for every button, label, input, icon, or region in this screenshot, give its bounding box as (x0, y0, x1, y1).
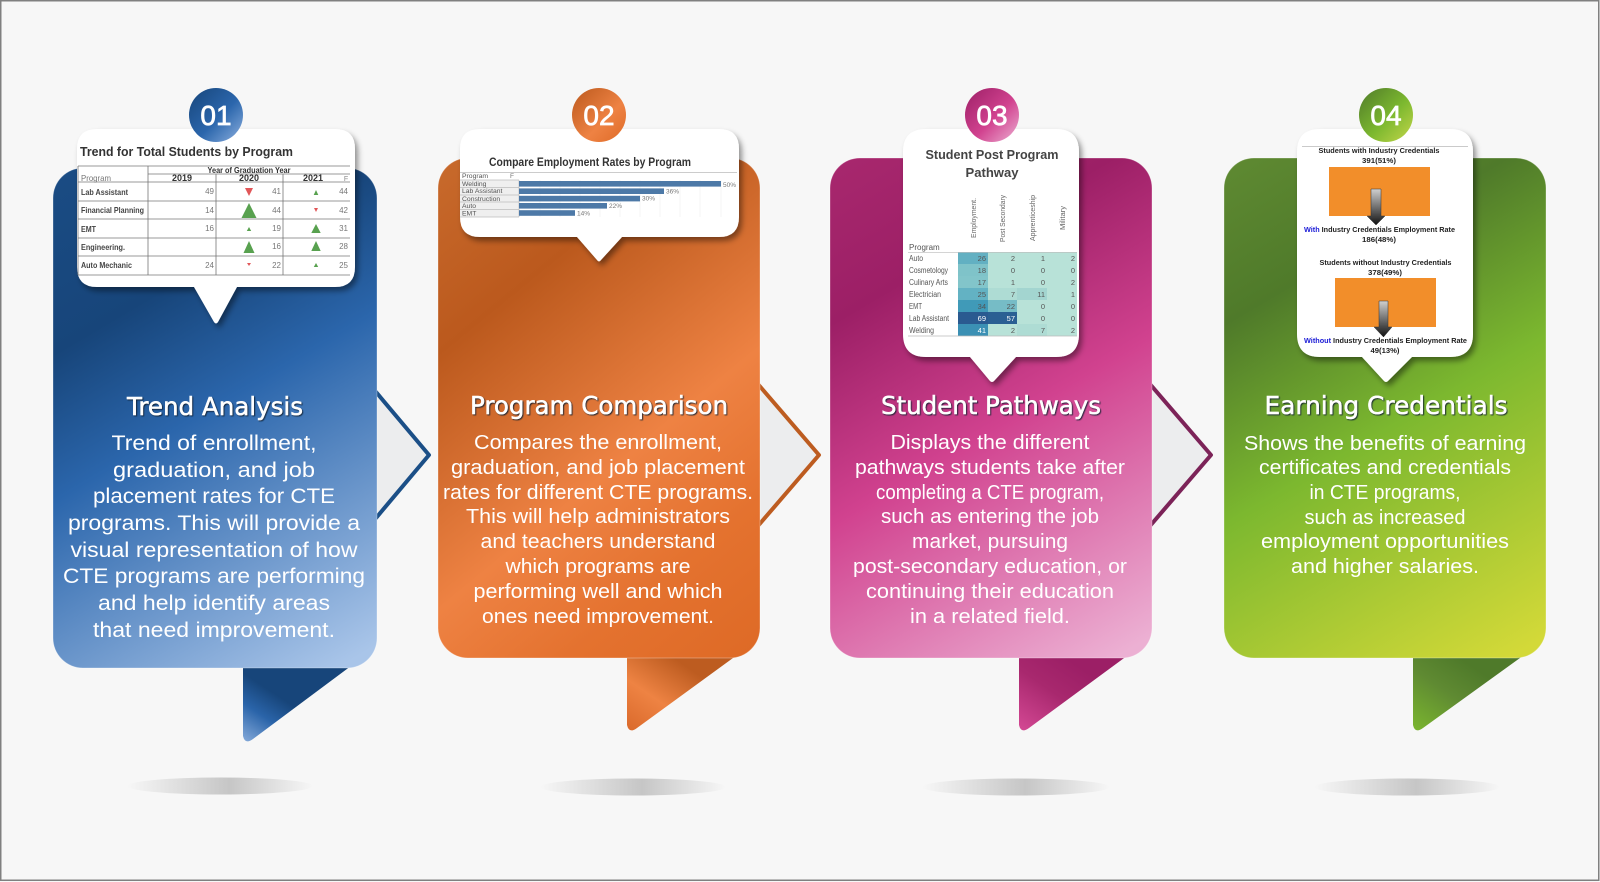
body text 3: in a related field. (910, 605, 1070, 628)
step 1: Trend Analysis (53, 88, 429, 794)
body text 3: continuing their education (866, 580, 1114, 603)
heat table: 0 (1071, 266, 1075, 275)
heat table: 34 (978, 302, 986, 311)
trend table: 22 (272, 261, 282, 270)
trend table: 19 (272, 224, 282, 233)
trend table: 49 (205, 187, 215, 196)
body text 2: and teachers understand (480, 530, 716, 553)
heat table title: Pathway (966, 165, 1019, 180)
heat table: Program (909, 243, 940, 252)
heat table: 2 (1011, 326, 1015, 335)
trend table: 2019 (172, 173, 192, 183)
heat table: 1 (1071, 290, 1075, 299)
heat table: Military (1058, 206, 1067, 230)
body text 3: Displays the different (890, 431, 1090, 454)
body text 1 (63, 431, 365, 642)
body text 2: ones need improvement. (482, 605, 714, 628)
bar chart: 22% (609, 203, 622, 210)
bar chart: Auto (462, 203, 476, 210)
number badge 01: 01 (200, 100, 232, 131)
heat table: Post Secondary (998, 195, 1007, 242)
trend table: F (344, 176, 348, 183)
heading: Program Comparison: Program Comparison (470, 391, 728, 420)
trend table: 42 (339, 206, 349, 215)
heat table: Culinary Arts (909, 278, 948, 287)
number badge 04 (1359, 88, 1413, 142)
trend table: 44 (339, 187, 349, 196)
heat table: 0 (1071, 302, 1075, 311)
heat table: 7 (1041, 326, 1045, 335)
heat table: 17 (978, 278, 986, 287)
bar chart: 50% (723, 182, 736, 189)
heat table: 2 (1071, 254, 1075, 263)
credentials flow chart: 378(49%) (1368, 268, 1403, 277)
ground shadow 4 (1314, 778, 1500, 796)
body text 1: CTE programs are performing (63, 564, 365, 588)
bar chart: Welding (462, 181, 487, 188)
heat table: 0 (1071, 314, 1075, 323)
heading: Trend Analysis: Trend Analysis (126, 392, 303, 421)
heat table: 1 (1011, 278, 1015, 287)
trend table: Auto Mechanic (81, 260, 132, 270)
panel tail 4 (1413, 650, 1531, 730)
body text 1: programs. This will provide a (68, 511, 360, 535)
trend table: Engineering. (81, 242, 125, 252)
arrow 1 (360, 373, 429, 537)
credentials flow chart: 49(13%) (1370, 346, 1400, 355)
panel tail 3 (1019, 650, 1135, 730)
number badge 02: 02 (583, 100, 615, 131)
credentials flow chart: Students without Industry Credentials (1320, 258, 1452, 267)
trend table: 25 (339, 261, 349, 270)
credentials flow chart: Without Industry Credentials Employment Rate (1304, 336, 1467, 345)
credentials flow chart: With Industry Credentials Employment Rate (1304, 225, 1455, 234)
callout: trend table (77, 129, 355, 324)
body text 1: visual representation of how (70, 538, 358, 562)
number badge 02 (572, 88, 626, 142)
trend table: Financial Planning (81, 205, 144, 215)
body text 4: and higher salaries. (1291, 555, 1479, 578)
table title: Trend for Total Students by Program (80, 144, 293, 159)
body text 4: employment opportunities (1261, 530, 1509, 553)
heat table title (926, 147, 1058, 180)
body text 2: graduation, and job placement (451, 456, 745, 479)
credentials flow chart: Students with Industry Credentials (1318, 146, 1440, 155)
heat table: 41 (978, 326, 986, 335)
heat table (908, 195, 1077, 336)
callout shape 4 (1297, 129, 1473, 382)
heat table: 69 (978, 314, 986, 323)
trend table: Year of Graduation Year (208, 166, 290, 175)
body text 2: performing well and which (474, 580, 722, 603)
heat table: 11 (1037, 290, 1045, 299)
bar chart: 30% (642, 196, 655, 202)
bar chart: 36% (666, 188, 679, 196)
body text 1: placement rates for CTE (93, 484, 335, 508)
bar chart: Program (462, 173, 488, 180)
panel tail 1 (243, 660, 359, 741)
credentials flow chart: 391(51%) (1362, 156, 1397, 165)
bar chart: F (510, 173, 514, 180)
body text 1: and help identify areas (98, 591, 330, 615)
trend table: 24 (205, 261, 215, 270)
panel body 2 (438, 158, 760, 658)
heat table: 1 (1041, 254, 1045, 263)
heat table: Auto (909, 254, 923, 263)
bar chart: Lab Assistant (462, 188, 503, 195)
heat table: Apprenticeship (1028, 195, 1037, 241)
credentials flow chart: 186(48%) (1362, 235, 1397, 244)
heat table: Employment. (969, 198, 978, 238)
heat table: 0 (1011, 266, 1015, 275)
heat table: EMT (909, 302, 922, 311)
heat table: Welding (909, 326, 934, 335)
trend table: Program (81, 173, 111, 183)
credentials flow chart (1302, 146, 1468, 355)
trend table: 14 (205, 206, 215, 215)
heat table: 0 (1041, 314, 1045, 323)
heat table: 22 (1007, 302, 1015, 311)
body text 3: market, pursuing (912, 530, 1068, 553)
body text 2: rates for different CTE programs. (443, 481, 753, 504)
heading: Earning Credentials: Earning Credentials (1264, 391, 1508, 420)
callout shape 1 (77, 129, 355, 324)
panel body 3 (830, 158, 1152, 658)
body text 2 (443, 431, 753, 628)
body text 3: pathways students take after (855, 456, 1125, 479)
trend table: 44 (272, 206, 282, 215)
heat table: 26 (978, 254, 986, 263)
trend table: 2020 (239, 173, 259, 183)
number badge 01 (189, 88, 243, 142)
heat table: 7 (1011, 290, 1015, 299)
panel body 1 (53, 168, 377, 668)
chart title: Compare Employment Rates by Program (489, 155, 691, 169)
heat table: Lab Assistant (909, 314, 950, 323)
body text 4: in CTE programs, (1310, 481, 1460, 504)
panel body 4 (1224, 158, 1546, 658)
callout: pathway heat table (903, 129, 1079, 382)
body text 4: certificates and credentials (1259, 456, 1511, 479)
body text 1: Trend of enrollment, (112, 431, 316, 455)
body text 3: such as entering the job (881, 505, 1099, 528)
body text 3 (853, 431, 1127, 628)
ground shadow 1 (127, 778, 313, 794)
arrow 2 (745, 369, 819, 541)
trend table: 28 (339, 242, 349, 251)
bar chart (460, 172, 737, 218)
number badge 04: 04 (1370, 100, 1402, 131)
callout shape 3 (903, 129, 1079, 382)
trend table: 31 (339, 224, 349, 233)
body text 3: post-secondary education, or (853, 555, 1127, 578)
trend table: 41 (272, 187, 282, 196)
body text 2: which programs are (504, 555, 690, 578)
body text 1: that need improvement. (93, 618, 335, 642)
heat table: 57 (1007, 314, 1015, 323)
callout: credentials flow (1297, 129, 1473, 382)
ground shadow 3 (922, 778, 1110, 796)
heat table: 25 (978, 290, 986, 299)
heading: Student Pathways: Student Pathways (881, 391, 1101, 420)
heat table title: Student Post Program (926, 147, 1058, 162)
body text 4: such as increased (1304, 506, 1466, 529)
body text 2: Compares the enrollment, (474, 431, 722, 454)
trend table: 16 (272, 242, 282, 251)
heat table: Electrician (909, 290, 941, 299)
trend table: Lab Assistant (81, 187, 128, 197)
heat table: 0 (1041, 302, 1045, 311)
body text 3: completing a CTE program, (876, 481, 1104, 504)
trend table: 16 (205, 224, 215, 233)
trend table: EMT (81, 224, 97, 234)
heat table: Cosmetology (909, 266, 948, 275)
number badge 03 (965, 88, 1019, 142)
step 4: Earning Credentials (1224, 88, 1546, 796)
trend table (78, 166, 350, 275)
heat table: 0 (1041, 278, 1045, 287)
number badge 03: 03 (976, 100, 1008, 131)
bar chart: 14% (577, 210, 590, 218)
ground shadow 2 (540, 778, 726, 796)
heat table: 0 (1041, 266, 1045, 275)
heat table: 2 (1071, 326, 1075, 335)
heat table: 2 (1071, 278, 1075, 287)
heat table: 2 (1011, 254, 1015, 263)
body text 1: graduation, and job (113, 458, 315, 482)
arrow 3 (1137, 369, 1211, 541)
step 3: Student Pathways (830, 88, 1211, 796)
bar chart: EMT (462, 210, 476, 218)
body text 4 (1244, 432, 1526, 578)
bar chart: Construction (462, 196, 500, 203)
body text 4: Shows the benefits of earning (1244, 432, 1526, 455)
trend table: 2021 (303, 173, 323, 183)
panel tail 2 (627, 650, 744, 730)
body text 2: This will help administrators (466, 505, 730, 528)
step 2: Program Comparison (438, 88, 819, 796)
callout shape 2 (460, 129, 739, 262)
heat table: 18 (978, 266, 986, 275)
callout: employment bar chart (460, 129, 739, 262)
